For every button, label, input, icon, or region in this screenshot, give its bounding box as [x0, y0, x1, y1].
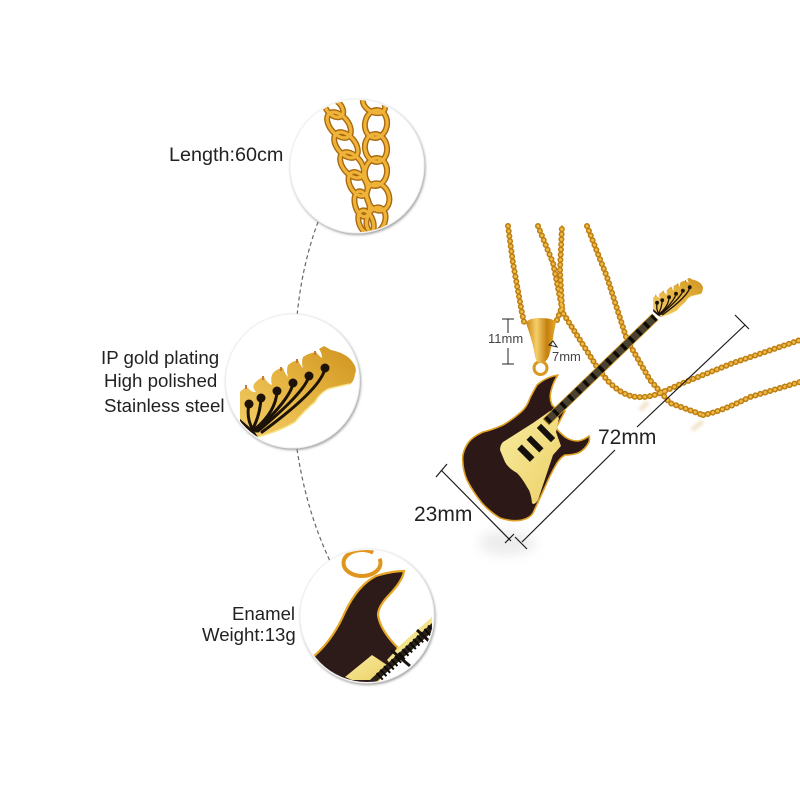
dimension: 7mm: 7mm: [552, 349, 581, 364]
guitar body: [463, 375, 590, 521]
label: material: [101, 347, 224, 416]
dimension: 11mm: 11mm: [488, 331, 523, 346]
necklace chains: [508, 226, 800, 415]
chain reflections: [640, 402, 703, 430]
dashed connector: length to plating: [297, 222, 318, 316]
label: enamel and weight: Enamel: [232, 603, 295, 624]
label: material: Stainless steel: [104, 395, 224, 416]
dimension: 72mm: [515, 315, 749, 549]
dashed connector: plating to enamel: [297, 449, 330, 561]
label: enamel and weight: [202, 603, 296, 645]
pendant bail and ring: [526, 318, 556, 374]
neck: [543, 314, 658, 425]
dimension: 11mm: [488, 319, 523, 364]
label: material: IP gold plating: [101, 347, 219, 368]
pendant reflection: [479, 531, 535, 555]
label: enamel and weight: Weight:13g: [202, 624, 296, 645]
guitar headstock: [653, 278, 703, 317]
headstock close-up: [240, 346, 356, 437]
guitar pendant: [463, 278, 703, 521]
label: material: High polished: [104, 370, 217, 391]
label: length: Length:60cm: [169, 144, 283, 166]
detail circle: headstock: [226, 314, 360, 448]
pickguard: [500, 411, 561, 504]
pickups: [517, 424, 555, 462]
dimension: 23mm: 23mm: [414, 503, 472, 526]
dimension: 72mm: 72mm: [598, 426, 656, 449]
detail circle: enamel body: [300, 549, 434, 700]
dimension: 7mm: [549, 341, 581, 364]
chain links: [323, 100, 392, 232]
body close-up: [314, 550, 432, 682]
dimension: 23mm: [414, 464, 514, 543]
detail circle: chain: [290, 91, 424, 236]
